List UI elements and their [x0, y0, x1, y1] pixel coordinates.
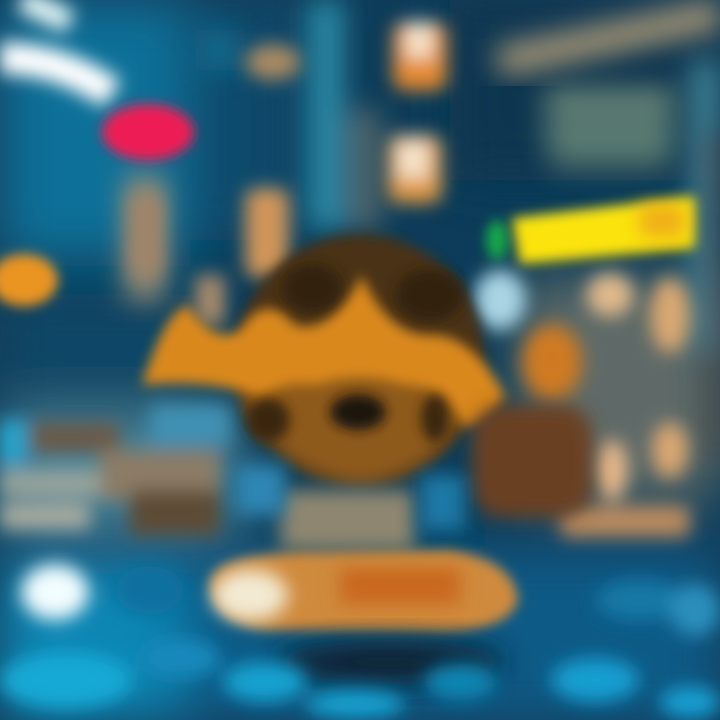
sign: orange left — [0, 254, 58, 306]
patches: blue beside pedestal — [235, 465, 465, 530]
coin: central ball — [142, 234, 505, 484]
floor: glowing blue tiles — [0, 564, 720, 718]
coin: right brown stack — [472, 324, 592, 517]
pedestal: stem under coin — [280, 490, 415, 550]
sign: tan strip top right — [498, 14, 720, 62]
coin: dark nose — [330, 394, 386, 430]
lights: tan and orange windows — [130, 22, 447, 325]
streaks: white lights top left — [0, 0, 112, 94]
pedestal: orange base — [210, 550, 518, 632]
coin mask: lower face — [240, 355, 470, 484]
sign: red oval — [102, 104, 194, 160]
coin: dark eyes — [246, 264, 464, 442]
floor: dark shadow under base — [275, 640, 505, 684]
towers: background buildings — [125, 0, 720, 460]
sign: green-grey text block — [545, 90, 675, 168]
counter: left desk shapes — [0, 405, 230, 535]
coin mask: orange band — [142, 275, 505, 426]
sign: yellow neon bar — [486, 196, 695, 264]
lights: right side cluster — [474, 270, 690, 537]
